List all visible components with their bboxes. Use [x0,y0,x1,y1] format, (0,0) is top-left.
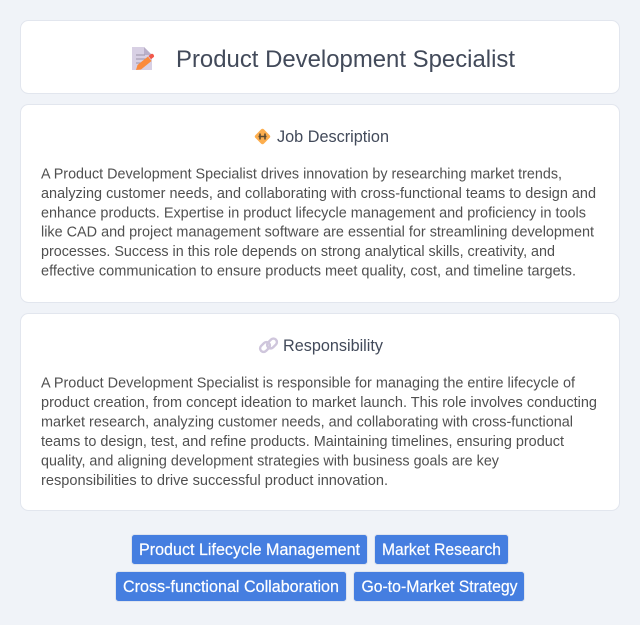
panel: title header [20,20,620,94]
chip: product lifecycle management [132,534,368,564]
icon: document with pencil [132,47,154,70]
text block: job description: A Product Development Specialist drives innovation by researching market trends, [41,166,562,182]
chip: go-to-market strategy: Go-to-Market Strategy [362,577,518,596]
panel: responsibility [20,314,620,510]
title: Product Development Specialist [176,46,515,73]
icon: chain link [259,337,278,353]
chip: cross-functional collaboration: Cross-functional Collaboration [123,577,339,596]
text block: responsibility [41,376,597,489]
text block: job description: analyzing customer needs, and collaborating with cross-functional teams to design and [41,186,596,202]
text block: responsibility: A Product Development Specialist is responsible for managing the entire lifecycle of [41,376,576,392]
text block: responsibility: quality, and aligning development strategies with business goals are key [41,454,500,470]
chip: cross-functional collaboration [116,572,346,602]
chip: market research [374,534,508,564]
text block: job description [41,166,596,280]
text block: responsibility: product creation, from concept ideation to market launch. This role involves conducting [41,395,597,411]
heading: responsibility: Responsibility [283,337,384,355]
text block: responsibility: responsibilities to drive successful product innovation. [41,473,388,489]
text block: responsibility: teams to design, test, and refine products. Maintaining timelines, ensuring product [41,434,564,450]
text block: responsibility: market research, analyzing customer needs, and collaborating with cross-functional [41,414,573,430]
text block: job description: enhance products. Expertise in product lifecycle management and proficiency in tools [41,206,586,222]
text block: job description: processes. Success in this role depends on strong analytical skills, creativity, and [41,244,555,260]
heading: job description: Job Description [277,128,389,146]
chip: product lifecycle management: Product Lifecycle Management [139,540,360,559]
text block: job description: like CAD and project management software are essential for streamlining development [41,224,594,240]
text block: job description: effective communication to ensure products meet quality, cost, and timeline targets. [41,264,576,280]
icon: orange diamond [254,128,271,145]
panel: job description [20,104,620,302]
chip: go-to-market strategy [354,572,524,602]
chip: market research: Market Research [382,540,501,559]
